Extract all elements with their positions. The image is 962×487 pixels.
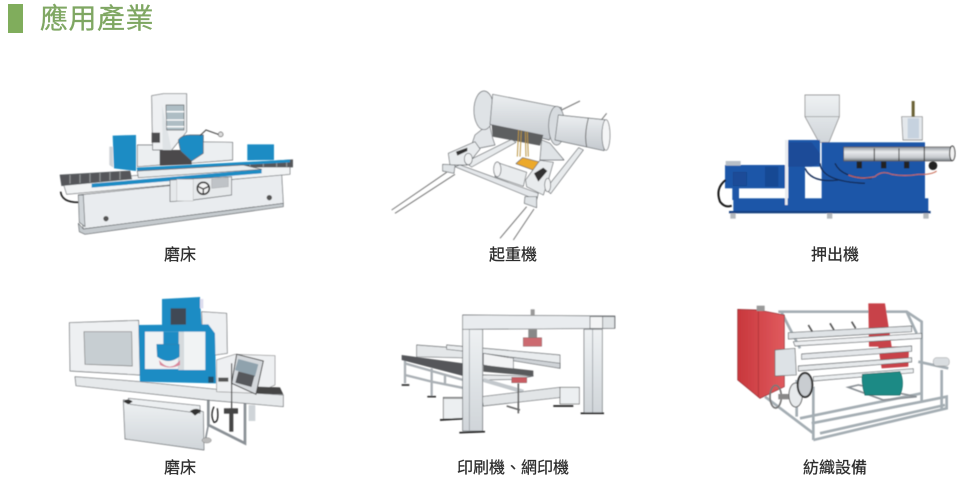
illustration: textile slitting machine	[738, 303, 949, 440]
title marker bar	[8, 4, 23, 33]
illustration: gantry conveyor printer	[402, 309, 615, 433]
illustration: crane roller frame	[392, 91, 610, 240]
title text: 應用產業	[40, 3, 154, 34]
label: 磨床	[164, 459, 196, 477]
label: 磨床	[164, 246, 196, 264]
panel: extruder	[718, 95, 955, 264]
title: 應用產業	[8, 3, 154, 34]
panel: printing and screen printing machine	[402, 309, 615, 477]
illustration: CNC surface grinder	[69, 297, 283, 450]
illustration: surface grinder with blue guards	[60, 94, 293, 234]
panel: textile equipment	[738, 303, 949, 477]
label: 押出機	[811, 246, 859, 264]
label: 起重機	[489, 246, 537, 264]
panel: surface grinder 1	[60, 94, 293, 264]
illustration: extruder machine	[718, 95, 955, 219]
label: 紡織設備	[803, 459, 867, 477]
panel: surface grinder 2	[69, 297, 283, 477]
panel: crane roller	[392, 91, 610, 264]
label: 印刷機、網印機	[457, 459, 569, 477]
